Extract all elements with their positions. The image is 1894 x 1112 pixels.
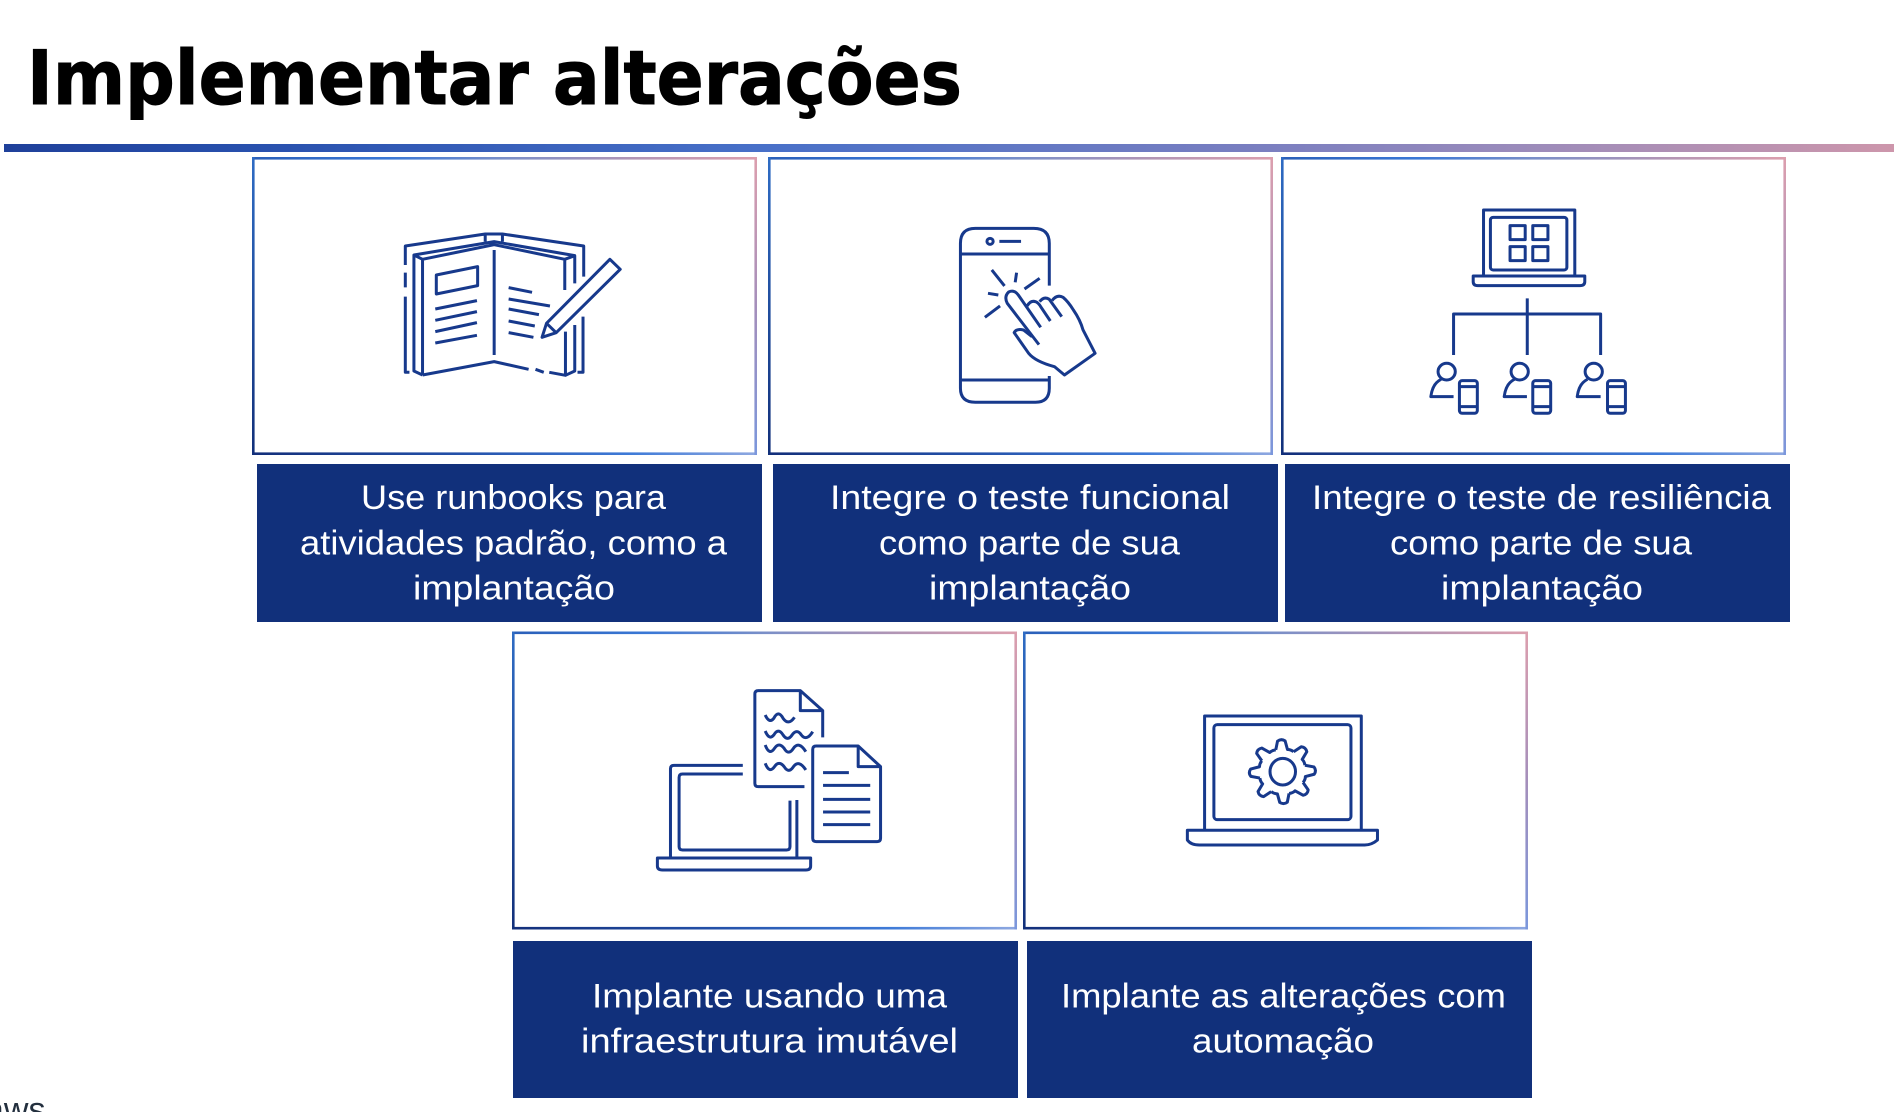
icon: open book with pencil (405, 234, 620, 375)
caption: functional testing: como parte de sua (879, 524, 1180, 562)
icon: laptop connected to users and phones (1431, 210, 1625, 413)
card frame: runbooks (252, 157, 757, 455)
card frame: functional testing (768, 157, 1273, 455)
caption: functional testing: Integre o teste funcional (830, 479, 1230, 517)
caption: deploy with automation (1027, 941, 1532, 1098)
card frame: immutable infrastructure (512, 632, 1017, 930)
caption: use runbooks (257, 464, 762, 622)
title: Implementar alterações (27, 34, 962, 122)
icon: phone with tapping hand (960, 228, 1095, 402)
caption: use runbooks: implantação (413, 570, 615, 608)
caption: resilience testing (1285, 464, 1790, 622)
caption: functional testing: implantação (929, 570, 1131, 608)
caption: use runbooks: Use runbooks para (361, 479, 666, 517)
caption: immutable infrastructure: infraestrutura imutável (581, 1022, 958, 1060)
panel: resilience testing (1281, 157, 1790, 622)
caption: deploy with automation: Implante as alterações com (1061, 978, 1506, 1016)
panel: use runbooks (252, 157, 762, 622)
card frame: deploy with automation (1023, 632, 1528, 930)
panel: functional testing (768, 157, 1278, 622)
icon: laptop with two documents (657, 691, 881, 870)
caption: resilience testing: como parte de sua (1390, 524, 1692, 562)
caption: resilience testing: implantação (1441, 570, 1643, 608)
caption: deploy with automation: automação (1192, 1022, 1374, 1060)
caption: immutable infrastructure: Implante usando uma (592, 978, 947, 1016)
card frame: resilience testing (1281, 157, 1786, 455)
caption: use runbooks: atividades padrão, como a (300, 524, 727, 562)
caption: resilience testing: Integre o teste de resiliência (1312, 479, 1771, 517)
icon: laptop with gear (1187, 716, 1377, 845)
caption: functional testing (773, 464, 1278, 622)
panel: deploy with automation (1023, 632, 1532, 1098)
panel: immutable infrastructure (512, 632, 1018, 1098)
caption: immutable infrastructure (513, 941, 1018, 1098)
